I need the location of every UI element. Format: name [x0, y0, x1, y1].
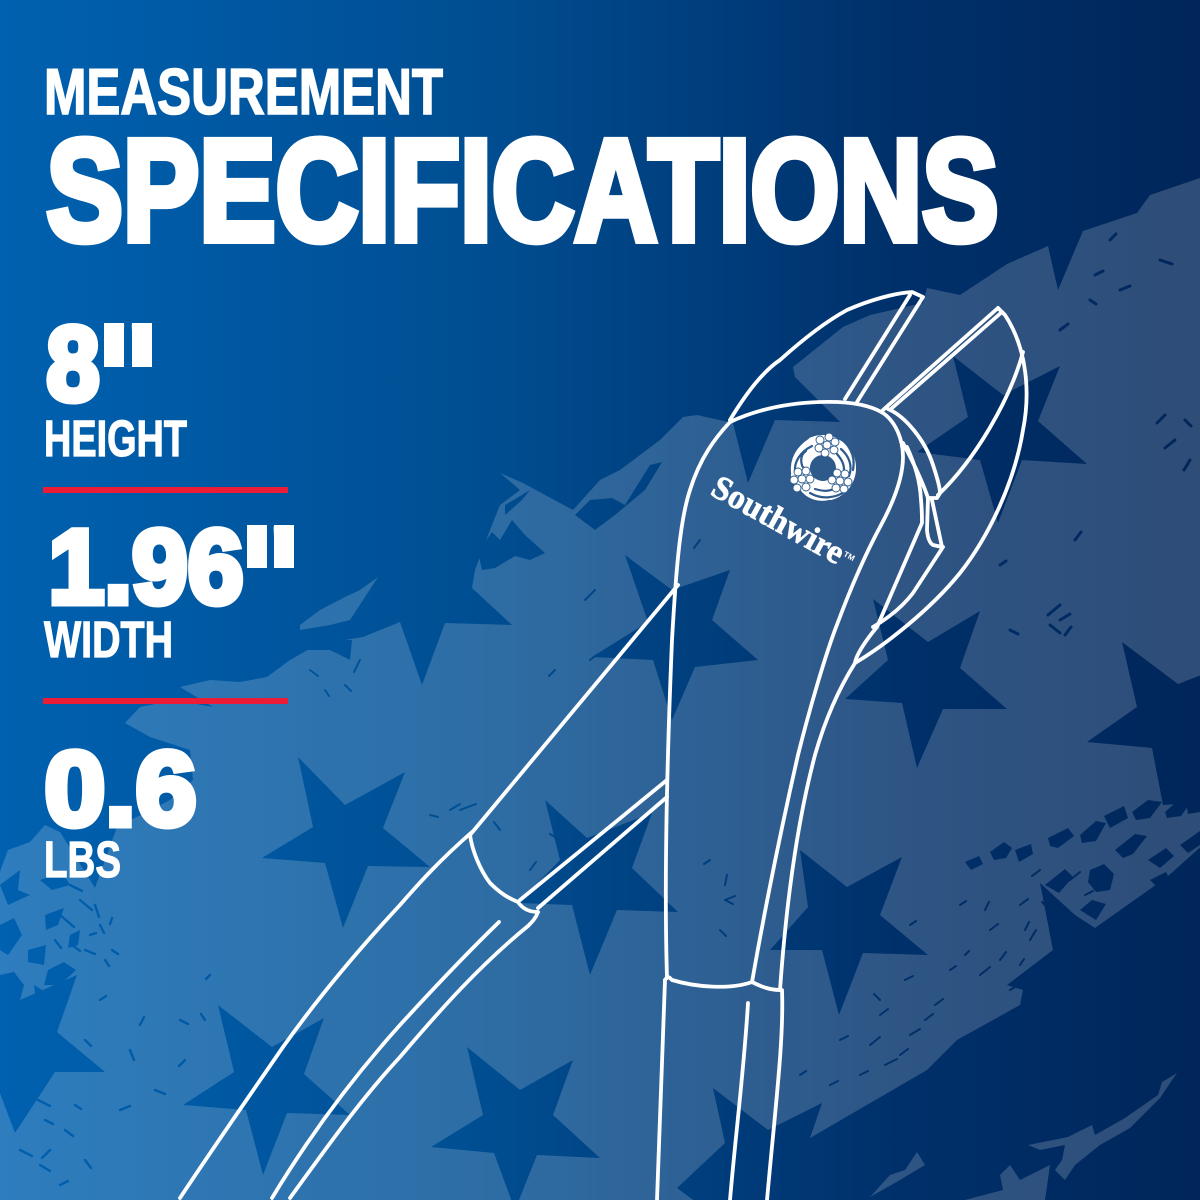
weight value: 0.6 — [44, 731, 196, 848]
upper jaw — [730, 292, 923, 420]
width label: WIDTH — [44, 611, 173, 668]
front grip collar — [665, 977, 780, 990]
weight label: LBS — [44, 831, 121, 888]
height value: 8 — [46, 306, 100, 423]
width value: 1.96 — [48, 509, 244, 626]
cutting edge lines — [883, 308, 1002, 410]
height value: " — [104, 299, 152, 433]
front grip — [657, 980, 782, 1200]
icon: Southwire wire logo — [790, 433, 856, 502]
height value — [46, 299, 152, 433]
divider: red rule 1 — [43, 487, 288, 493]
width value: " — [247, 501, 293, 635]
inner jaw curve — [938, 352, 1023, 495]
neck and lower jaw outer curve — [780, 308, 1027, 990]
jaw collar — [888, 409, 942, 547]
stat: width — [44, 501, 294, 668]
height label: HEIGHT — [44, 410, 187, 467]
pliers line illustration — [180, 292, 1027, 1200]
back grip collar — [470, 835, 538, 912]
back grip — [180, 832, 472, 1198]
pivot detail — [855, 443, 943, 663]
stat: height — [44, 299, 187, 467]
front handle and head outline — [666, 402, 903, 982]
back grip edges — [272, 912, 538, 1198]
title line: MEASUREMENT: MEASUREMENT — [44, 55, 443, 128]
Southwire wordmark: TM — [842, 550, 857, 563]
divider: red rule 2 — [43, 698, 288, 704]
thin neck lines — [520, 780, 667, 908]
stat: weight — [44, 731, 196, 888]
back handle — [470, 585, 678, 835]
Southwire wordmark: Southwire — [705, 469, 851, 572]
